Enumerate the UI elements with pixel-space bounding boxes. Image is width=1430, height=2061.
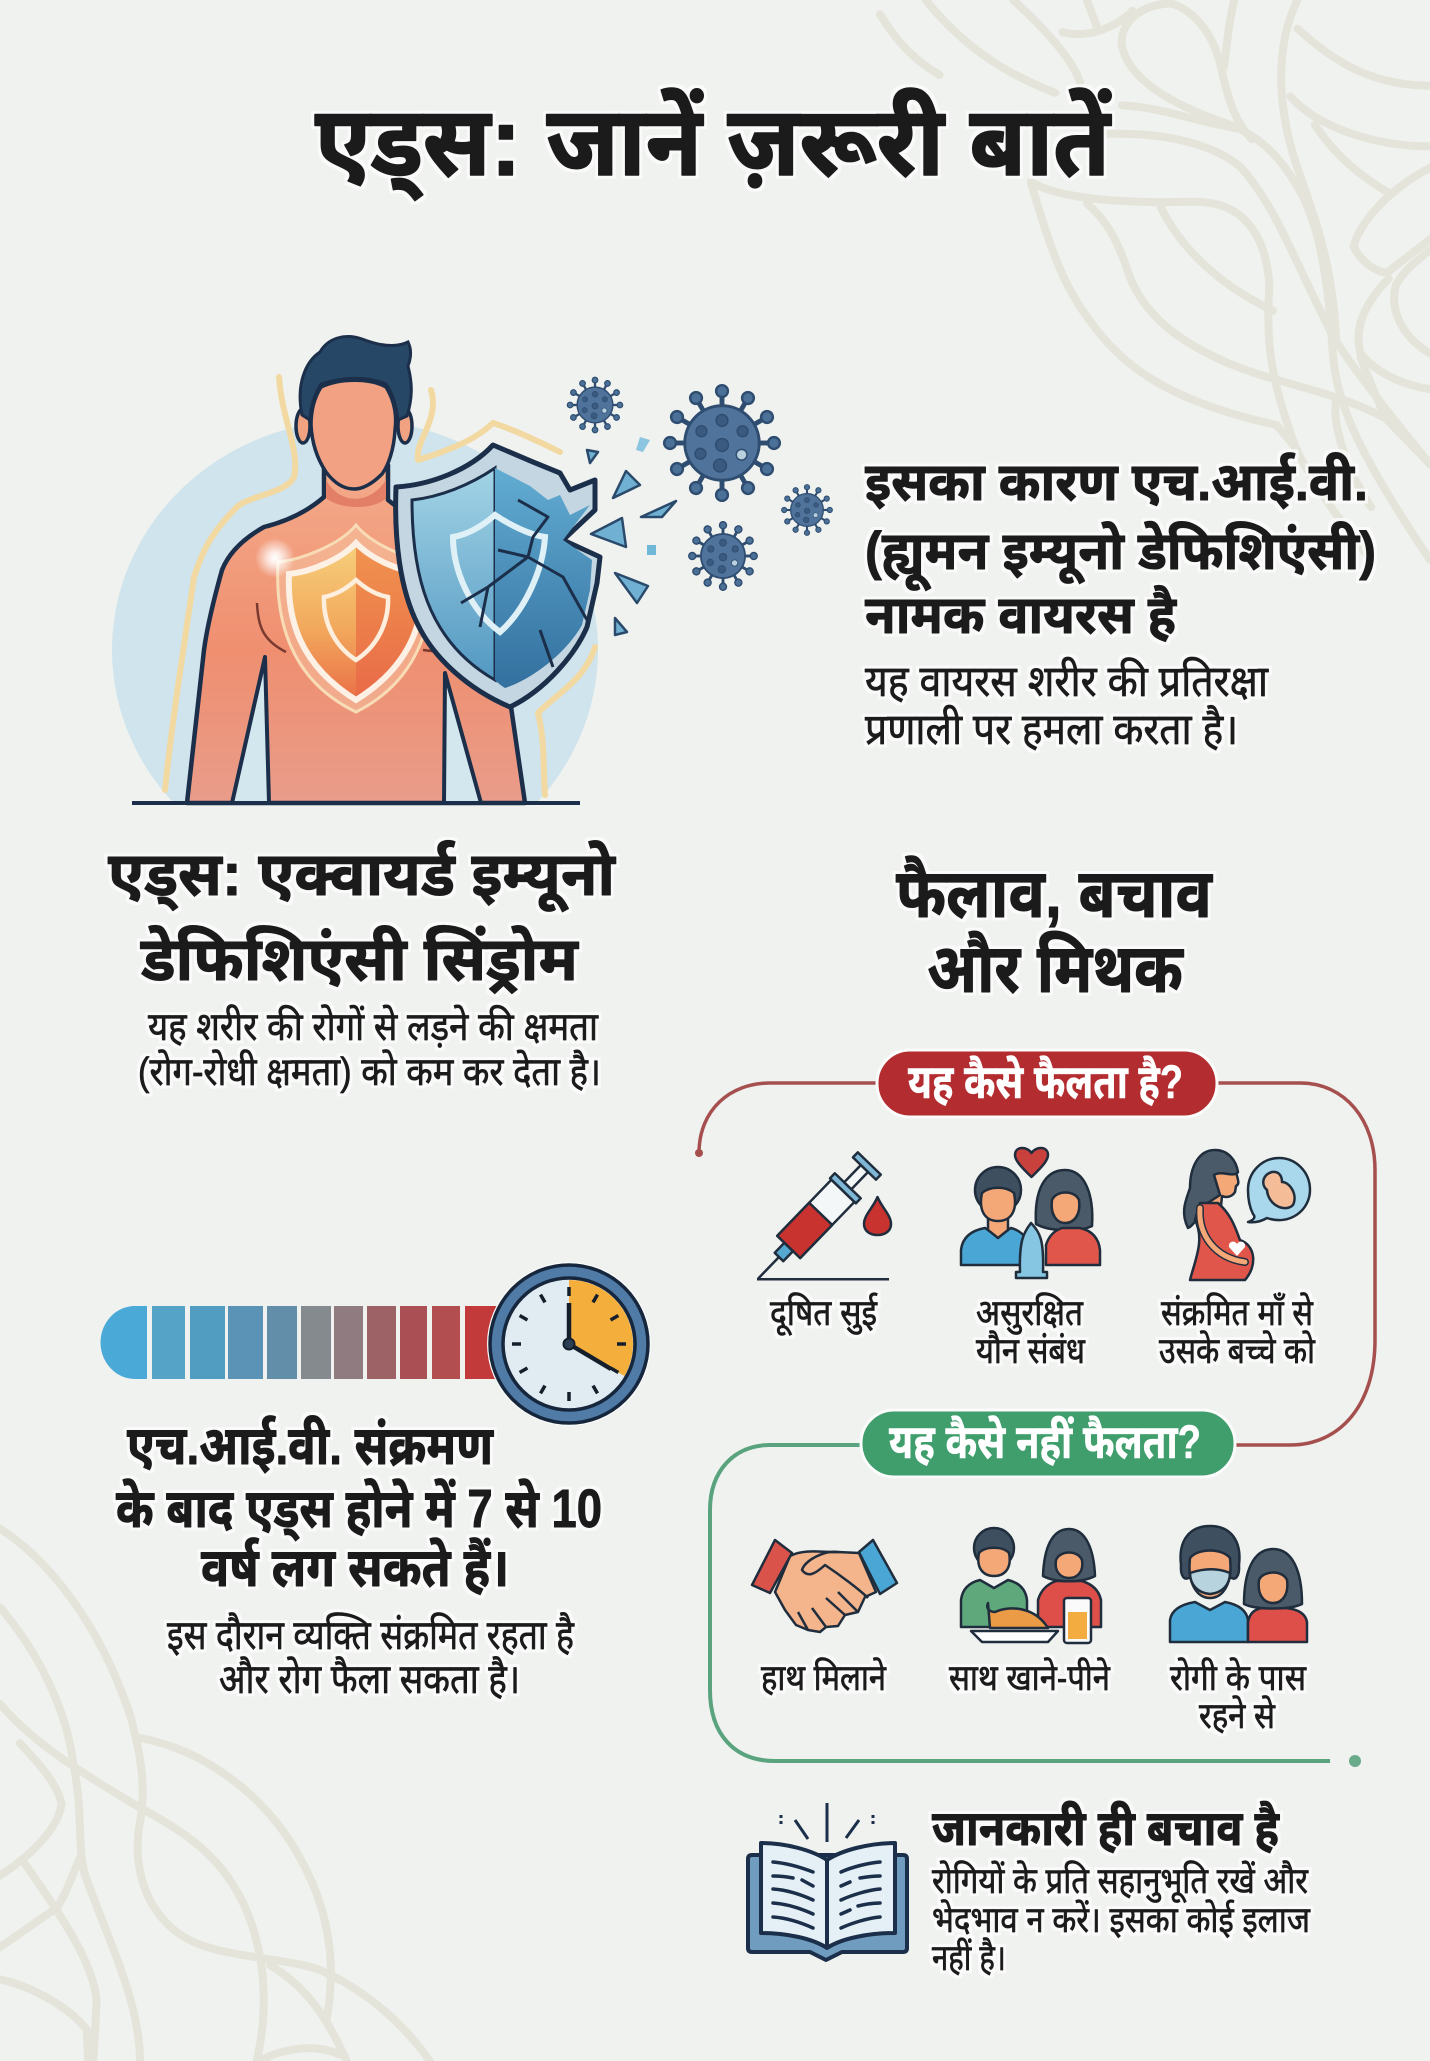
green connector line	[710, 1445, 1330, 1761]
ground line	[132, 801, 580, 805]
text: AIDS definition: यह शरीर की रोगों से लड़ने की क्षमता	[148, 1005, 599, 1049]
text: HIV to AIDS duration	[116, 1415, 602, 1702]
text: cause: प्रणाली पर हमला करता है।	[865, 705, 1238, 754]
viruses	[567, 377, 832, 590]
text: AIDS definition	[108, 840, 616, 1094]
backdrop circle	[112, 426, 598, 801]
text: AIDS definition: एड्स: एक्वायर्ड इम्यूनो	[108, 840, 616, 913]
text: AIDS definition: (रोग-रोधी क्षमता) को कम कर देता है।	[138, 1050, 601, 1094]
neck shade	[326, 480, 386, 507]
labels: how it spreads: यौन संबंध	[976, 1330, 1086, 1371]
text: cause: नामक वायरस है	[865, 585, 1177, 645]
title: एड्स: जानें ज़रूरी बातें	[315, 87, 1112, 201]
text: HIV to AIDS duration: के बाद एड्स होने में 7 से 10	[116, 1478, 602, 1542]
text: HIV to AIDS duration: वर्ष लग सकते हैं।	[201, 1537, 509, 1598]
text: knowledge is protection: जानकारी ही बचाव है	[932, 1800, 1280, 1856]
body	[187, 465, 525, 803]
text: knowledge is protection	[932, 1800, 1311, 1978]
text: knowledge is protection: नहीं है।	[932, 1937, 1006, 1978]
connector dot green	[1349, 1755, 1361, 1767]
ears	[296, 409, 412, 443]
aura lines	[165, 377, 595, 795]
labels: how it spreads	[770, 1291, 1316, 1371]
text: cause: (ह्यूमन इम्यूनो डेफिशिएंसी)	[865, 521, 1376, 592]
red connector line	[699, 1083, 1375, 1445]
cracked shield	[396, 445, 600, 707]
hair	[300, 337, 411, 420]
heading: spread and myths	[896, 856, 1214, 1007]
background pattern: top right	[880, 0, 1430, 560]
connector dot red	[695, 1149, 703, 1157]
labels: how it does not spread: रोगी के पास	[1170, 1657, 1307, 1698]
labels: how it spreads: उसके बच्चे को	[1159, 1330, 1316, 1371]
icon: eating together	[961, 1528, 1101, 1643]
labels: how it does not spread: रहने से	[1199, 1695, 1276, 1736]
text: cause	[865, 452, 1376, 754]
chest shield	[289, 543, 356, 700]
text: HIV to AIDS duration: इस दौरान व्यक्ति संक्रमित रहता है	[167, 1611, 575, 1658]
labels: how it does not spread	[761, 1657, 1307, 1736]
heading: spread and myths: फैलाव, बचाव	[896, 856, 1214, 932]
icon: syringe	[745, 1151, 891, 1291]
sparkle	[255, 538, 295, 578]
illustration: person with cracked shield and viruses	[112, 335, 833, 806]
chest shield glow	[278, 525, 432, 712]
text: AIDS definition: डेफिशिएंसी सिंड्रोम	[140, 925, 579, 994]
heading: spread and myths: और मिथक	[927, 931, 1184, 1007]
labels: how it does not spread: हाथ मिलाने	[761, 1657, 887, 1698]
background pattern: bottom left	[0, 1529, 430, 2061]
chest lines	[257, 603, 440, 652]
text: cause: यह वायरस शरीर की प्रतिरक्षा	[865, 657, 1269, 706]
labels: how it spreads: संक्रमित माँ से	[1161, 1291, 1314, 1333]
clock	[487, 1262, 651, 1426]
labels: how it spreads: दूषित सुई	[770, 1292, 878, 1336]
icon: handshake	[752, 1540, 897, 1632]
icon: couple with condom	[961, 1148, 1100, 1278]
labels: how it does not spread: साथ खाने-पीने	[949, 1657, 1111, 1698]
pill: how it spreads: यह कैसे फैलता है?	[908, 1055, 1183, 1108]
icon: sitting near patient	[1170, 1526, 1307, 1642]
pill: how it spreads	[877, 1050, 1217, 1117]
face	[311, 380, 396, 489]
text: knowledge is protection: रोगियों के प्रति सहानुभूति रखें और	[932, 1860, 1309, 1903]
arm gaps	[232, 657, 481, 803]
icon: open book	[748, 1803, 907, 1960]
text: HIV to AIDS duration: और रोग फैला सकता है।	[219, 1655, 520, 1702]
labels: how it spreads: असुरक्षित	[976, 1292, 1084, 1335]
shards	[587, 437, 676, 635]
text: cause: इसका कारण एच.आई.वी.	[865, 452, 1368, 512]
text: HIV to AIDS duration: एच.आई.वी. संक्रमण	[127, 1415, 494, 1476]
pill: how it does not spread	[861, 1410, 1235, 1477]
text: knowledge is protection: भेदभाव न करें। इसका कोई इलाज	[932, 1899, 1311, 1940]
pill: how it does not spread: यह कैसे नहीं फैलता?	[889, 1415, 1201, 1468]
timeline bar	[101, 1306, 505, 1379]
icon: pregnant mother	[1184, 1150, 1310, 1280]
